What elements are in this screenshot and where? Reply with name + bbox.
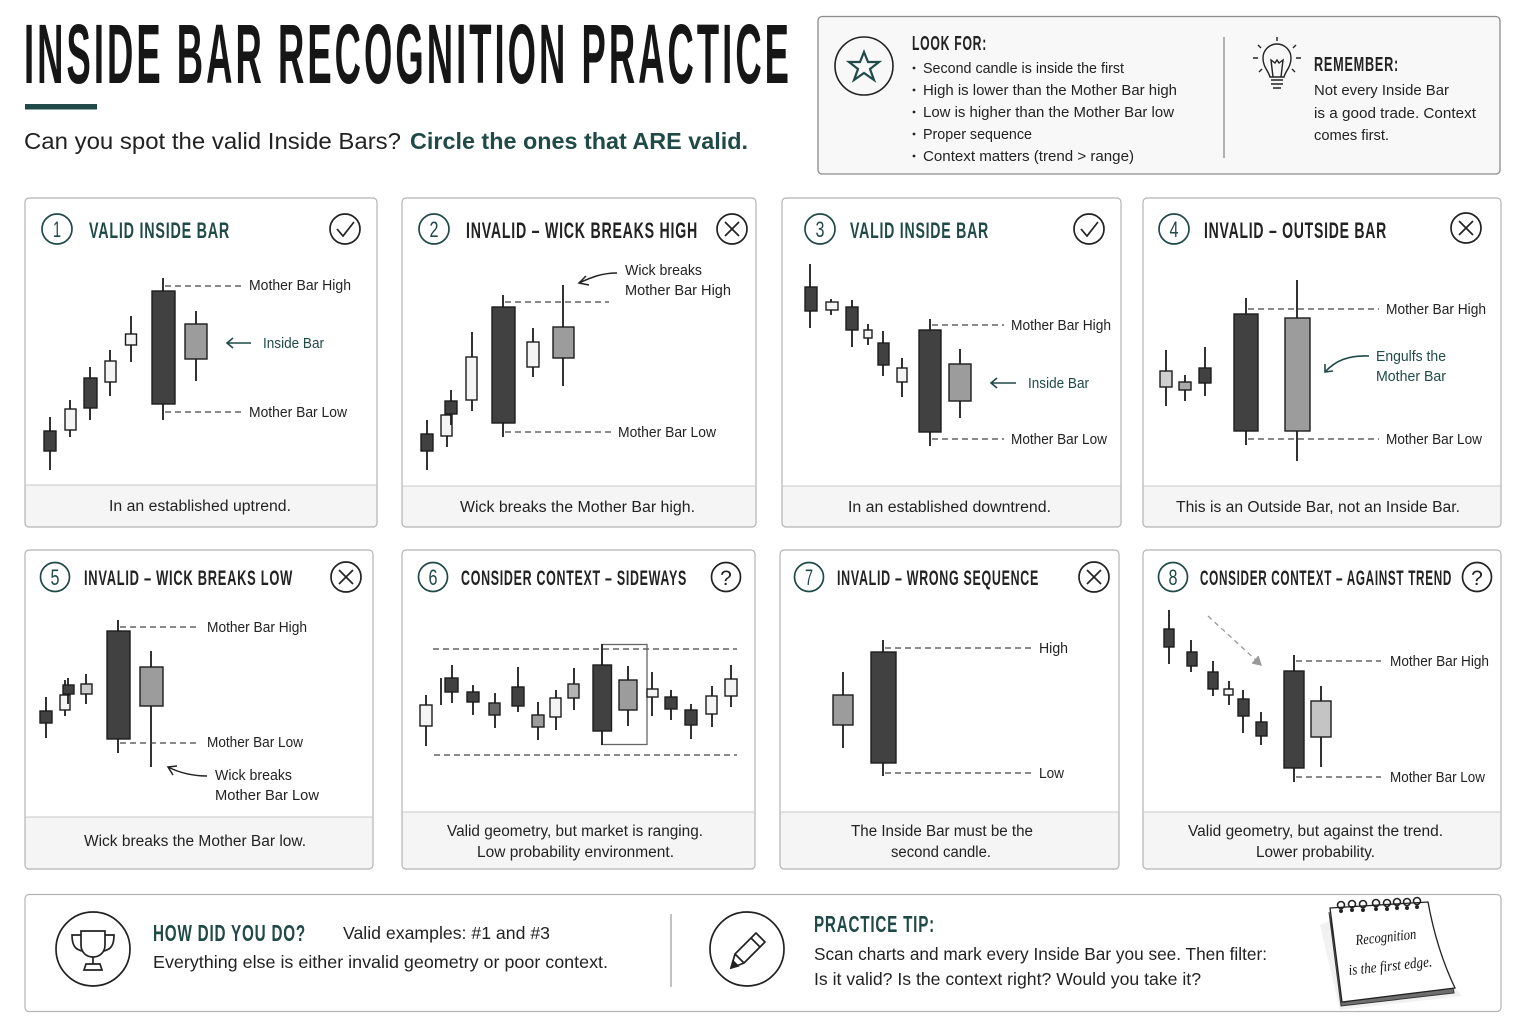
annotations: Mother Bar High: [1011, 318, 1111, 334]
annotations: Mother Bar Low: [618, 425, 716, 441]
annotations: Mother Bar Low: [1011, 432, 1107, 448]
panel: card 8 against trend: [1143, 550, 1501, 869]
annotations: [1296, 654, 1489, 786]
checklist: Context matters (trend > range): [923, 148, 1134, 165]
candlestick chart: [421, 285, 574, 470]
annotations: Inside Bar: [1028, 376, 1089, 392]
tip text: Is it valid? Is the context right? Would you take it?: [814, 969, 1201, 989]
caption: Valid geometry, but market is ranging.: [447, 823, 703, 840]
annotations: Wick breaks: [625, 263, 702, 279]
annotations: [505, 263, 731, 441]
title accent bar: [25, 104, 97, 110]
caption: [447, 823, 703, 861]
annotations: Mother Bar Low: [1390, 770, 1485, 786]
annotations: Wick breaks: [215, 768, 292, 784]
remember text: is a good trade. Context: [1314, 105, 1477, 122]
heading: remember: REMEMBER:: [1314, 54, 1399, 76]
panel: bottom summary: [25, 894, 1501, 1012]
caption: Wick breaks the Mother Bar low.: [84, 833, 306, 850]
summary text: Everything else is either invalid geometry or poor context.: [153, 952, 608, 972]
icon: cross: [1079, 562, 1109, 592]
subtitle: Can you spot the valid Inside Bars?: [24, 128, 401, 154]
caption: [851, 823, 1033, 861]
number badge: 4: [1170, 217, 1178, 242]
card heading: INVALID – WRONG SEQUENCE: [837, 567, 1039, 590]
candlestick chart: [805, 264, 971, 446]
annotations: Mother Bar Low: [249, 405, 347, 421]
panel: card 4 outside bar: [1143, 198, 1501, 527]
candlestick chart: [40, 620, 163, 767]
annotations: Low: [1039, 766, 1064, 782]
number badge: [418, 562, 448, 592]
annotations: Mother Bar Low: [207, 735, 303, 751]
caption: Low probability environment.: [477, 844, 674, 861]
card heading: CONSIDER CONTEXT – SIDEWAYS: [461, 567, 687, 590]
subtitle: Circle the ones that ARE valid.: [410, 128, 748, 154]
caption: Wick breaks the Mother Bar high.: [460, 499, 695, 516]
number badge: 3: [816, 217, 824, 242]
annotations: [932, 318, 1111, 448]
divider: [1223, 37, 1225, 158]
annotations: Mother Bar: [1376, 369, 1446, 385]
annotations: Mother Bar High: [1386, 302, 1486, 318]
number badge: [419, 214, 449, 244]
valid examples: Valid examples: #1 and #3: [343, 923, 550, 943]
candlestick chart: [44, 278, 207, 470]
icon: check: [330, 214, 360, 244]
annotations: [165, 278, 351, 421]
number badge: [42, 214, 72, 244]
remember text: Not every Inside Bar: [1314, 82, 1449, 99]
icon: cross: [717, 214, 747, 244]
annotations: Mother Bar High: [249, 278, 351, 294]
candlestick chart: [1164, 610, 1331, 782]
panel: look for and remember: [818, 16, 1500, 174]
annotations: High: [1039, 641, 1068, 657]
icon: question: ?: [1471, 567, 1483, 590]
caption: In an established downtrend.: [848, 499, 1051, 516]
remember text: [1314, 82, 1477, 144]
checklist: Low is higher than the Mother Bar low: [923, 104, 1174, 121]
annotations: Mother Bar High: [625, 283, 731, 299]
icon: cross: [331, 562, 361, 592]
number badge: 1: [53, 217, 61, 242]
number badge: [805, 214, 835, 244]
annotations: Mother Bar High: [207, 620, 307, 636]
heading: look for: LOOK FOR:: [912, 33, 987, 55]
checklist: High is lower than the Mother Bar high: [923, 82, 1177, 99]
caption: In an established uptrend.: [109, 498, 291, 515]
number badge: [794, 562, 824, 592]
checklist: [913, 60, 1177, 165]
panel: card 7 wrong sequence: [780, 550, 1119, 869]
annotations: Mother Bar Low: [215, 788, 320, 804]
caption: This is an Outside Bar, not an Inside Bar.: [1176, 499, 1460, 516]
card heading: INVALID – WICK BREAKS HIGH: [466, 218, 698, 243]
illustration: notebook: Recognition: [1354, 927, 1417, 949]
illustration: notebook: is the first edge.: [1348, 954, 1433, 979]
caption: Valid geometry, but against the trend.: [1188, 823, 1443, 840]
tip text: Scan charts and mark every Inside Bar you see. Then filter:: [814, 944, 1267, 964]
icon: check: [1074, 214, 1104, 244]
number badge: 8: [1168, 565, 1178, 590]
checklist: Second candle is inside the first: [923, 60, 1125, 77]
card heading: VALID INSIDE BAR: [850, 218, 989, 243]
icon: star: [835, 37, 893, 95]
icon: cross: [1451, 213, 1481, 243]
candlestick chart: [1160, 280, 1310, 461]
number badge: 2: [430, 217, 438, 242]
icon: trophy: [56, 912, 130, 986]
panel: card 2 wick breaks high: [402, 198, 756, 527]
caption: [1188, 823, 1443, 861]
icon: question: ?: [720, 567, 732, 590]
icon: question: [712, 562, 740, 592]
candlestick chart: [420, 644, 737, 746]
card heading: INVALID – OUTSIDE BAR: [1204, 218, 1387, 243]
annotations: [120, 620, 320, 804]
panel: card 5 wick breaks low: [25, 550, 373, 869]
tip text: [814, 944, 1267, 989]
annotations: Mother Bar High: [1390, 654, 1489, 670]
number badge: 7: [805, 565, 813, 590]
annotations: [1248, 302, 1486, 448]
icon: question: [1462, 562, 1492, 592]
caption: Lower probability.: [1256, 844, 1375, 861]
range box and lines: [433, 644, 737, 755]
panel: card 6 sideways: [402, 550, 755, 869]
caption: The Inside Bar must be the: [851, 823, 1033, 840]
icon: pencil: [710, 912, 784, 986]
annotations: Engulfs the: [1376, 349, 1446, 365]
number badge: 5: [50, 565, 60, 590]
candlestick chart: [833, 640, 896, 776]
heading: practice tip: PRACTICE TIP:: [814, 911, 935, 937]
number badge: [40, 562, 70, 592]
caption: second candle.: [891, 844, 991, 861]
heading: how did you do: HOW DID YOU DO?: [153, 920, 306, 946]
number badge: 6: [428, 565, 438, 590]
annotations: Inside Bar: [263, 336, 324, 352]
number badge: [1158, 562, 1188, 592]
divider: [670, 914, 672, 987]
annotations: [885, 641, 1068, 782]
panel: card 1 valid inside bar: [25, 198, 377, 527]
annotations: Mother Bar Low: [1386, 432, 1482, 448]
remember text: comes first.: [1314, 127, 1389, 144]
number badge: [1159, 214, 1189, 244]
card heading: INVALID – WICK BREAKS LOW: [84, 567, 293, 590]
checklist: Proper sequence: [923, 126, 1032, 143]
illustration: notebook: [1320, 898, 1462, 1010]
icon: light bulb: [1253, 37, 1301, 88]
trend arrow: [1208, 616, 1261, 665]
panel: card 3 valid inside bar downtrend: [782, 198, 1121, 527]
card heading: VALID INSIDE BAR: [89, 218, 230, 243]
